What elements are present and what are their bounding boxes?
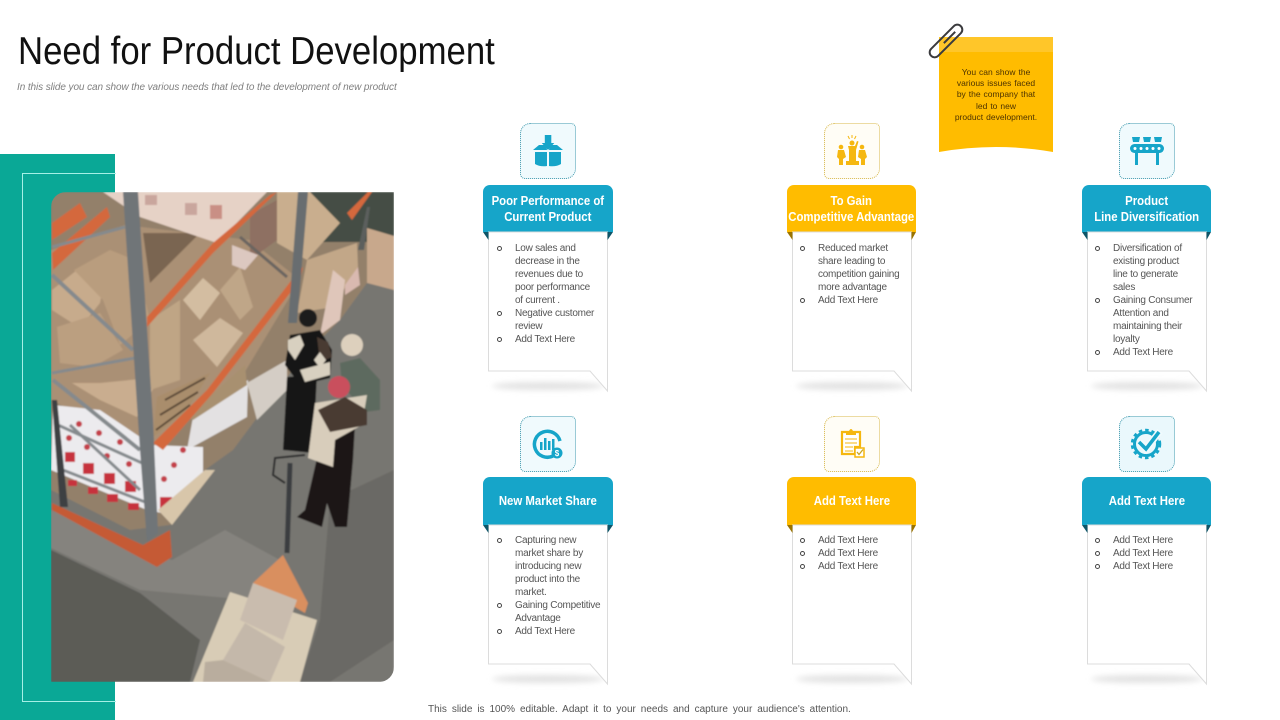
bullet list: Add Text Here [1113,548,1173,558]
bullet list: Add Text Here [818,548,878,558]
card body shape [1082,232,1211,392]
heading: Current Product [504,210,592,224]
bullet list: poor performance [515,282,590,292]
bullet list: share leading to [818,256,885,266]
bullet list: Add Text Here [1113,534,1173,546]
bullet list: competition gaining [818,268,899,280]
heading: Poor Performance of [492,194,604,208]
bullet list: Gaining Competitive [515,600,600,610]
bullet list: loyalty [1113,334,1140,344]
bullet list [1095,534,1173,572]
bullet list: Low sales and [515,242,576,254]
bullet list: Add Text Here [515,334,575,344]
note text: led to new [976,101,1016,111]
bullet list: Capturing new [515,534,576,546]
icon: conveyor belt [1119,123,1175,179]
bullet list: Add Text Here [818,294,878,306]
icon: box with down arrow [520,123,576,179]
icon: chart ring with dollar [520,416,576,472]
panel: new market share [483,416,613,685]
bullet list: introducing new [515,560,581,572]
icon: gear with check [1119,416,1175,472]
bullet list: Advantage [515,612,561,624]
bullet list: Negative customer [515,308,594,318]
bullet list: maintaining their [1113,320,1182,332]
bullet list: more advantage [818,282,887,292]
bullet list: Add Text Here [818,560,878,572]
bullet list: Reduced market [818,242,888,254]
note text [955,67,1037,122]
bullet list [1095,242,1192,358]
bullet list [800,534,878,572]
heading [1082,185,1211,232]
panel: add text yellow [787,416,916,685]
icon: paperclip [928,24,964,58]
bullet list: Add Text Here [1113,346,1173,358]
bullet list [497,534,600,636]
sticky note callout [928,24,1053,152]
panel: line diversification [1082,123,1211,392]
photo: warehouse workers among pallet racks [51,192,394,682]
card body shape [787,524,916,685]
bullet list [800,242,899,306]
card body shape [483,232,613,392]
note text: by the company that [957,89,1035,99]
bullet list: line to generate [1113,268,1178,280]
bullet list: product into the [515,574,580,584]
heading: Add Text Here [813,494,890,508]
bullet list: revenues due to [515,268,583,280]
heading [483,185,613,232]
note text: product development. [955,112,1037,122]
note text: various issues faced [957,78,1035,88]
panel: competitive advantage [787,123,916,392]
panel: poor performance [483,123,613,392]
bullet list [497,242,594,344]
heading: Competitive Advantage [789,210,915,224]
bullet list: market. [515,586,547,598]
title: Need for Product Development [18,30,495,73]
card body shape [1082,524,1211,685]
heading: Product [1125,194,1168,208]
footer note: This slide is 100% editable. Adapt it to your needs and capture your audience's attention. [428,704,851,715]
note text: You can show the [962,67,1030,77]
bullet list: existing product [1113,256,1179,266]
bullet list: Add Text Here [818,534,878,546]
bullet list: review [515,320,542,332]
bullet list: Diversification of [1113,242,1182,254]
inner outline frame [22,173,116,702]
heading: Line Diversification [1094,210,1199,224]
heading [787,477,916,525]
bullet list: Add Text Here [1113,560,1173,572]
heading: Add Text Here [1108,494,1185,508]
bullet list: Attention and [1113,308,1169,318]
icon: clipboard with check [824,416,880,472]
icon: chart ring with dollar: $ [555,449,560,458]
bullet list: market share by [515,548,583,558]
bullet list: Gaining Consumer [1113,294,1192,306]
teal background panel [0,154,115,720]
bullet list: sales [1113,282,1135,292]
bullet list: Add Text Here [515,626,575,636]
icon: team with leader [824,123,880,179]
bullet list: of current . [515,294,560,306]
card body shape [787,232,916,392]
heading [483,477,613,525]
heading: To Gain [831,194,872,208]
note shape [939,37,1053,152]
panel: add text blue [1082,416,1211,685]
card body shape [483,524,613,685]
subtitle: In this slide you can show the various needs that led to the development of new product [17,82,397,93]
heading: New Market Share [499,494,597,508]
heading [1082,477,1211,525]
bullet list: decrease in the [515,256,580,266]
heading [787,185,916,232]
